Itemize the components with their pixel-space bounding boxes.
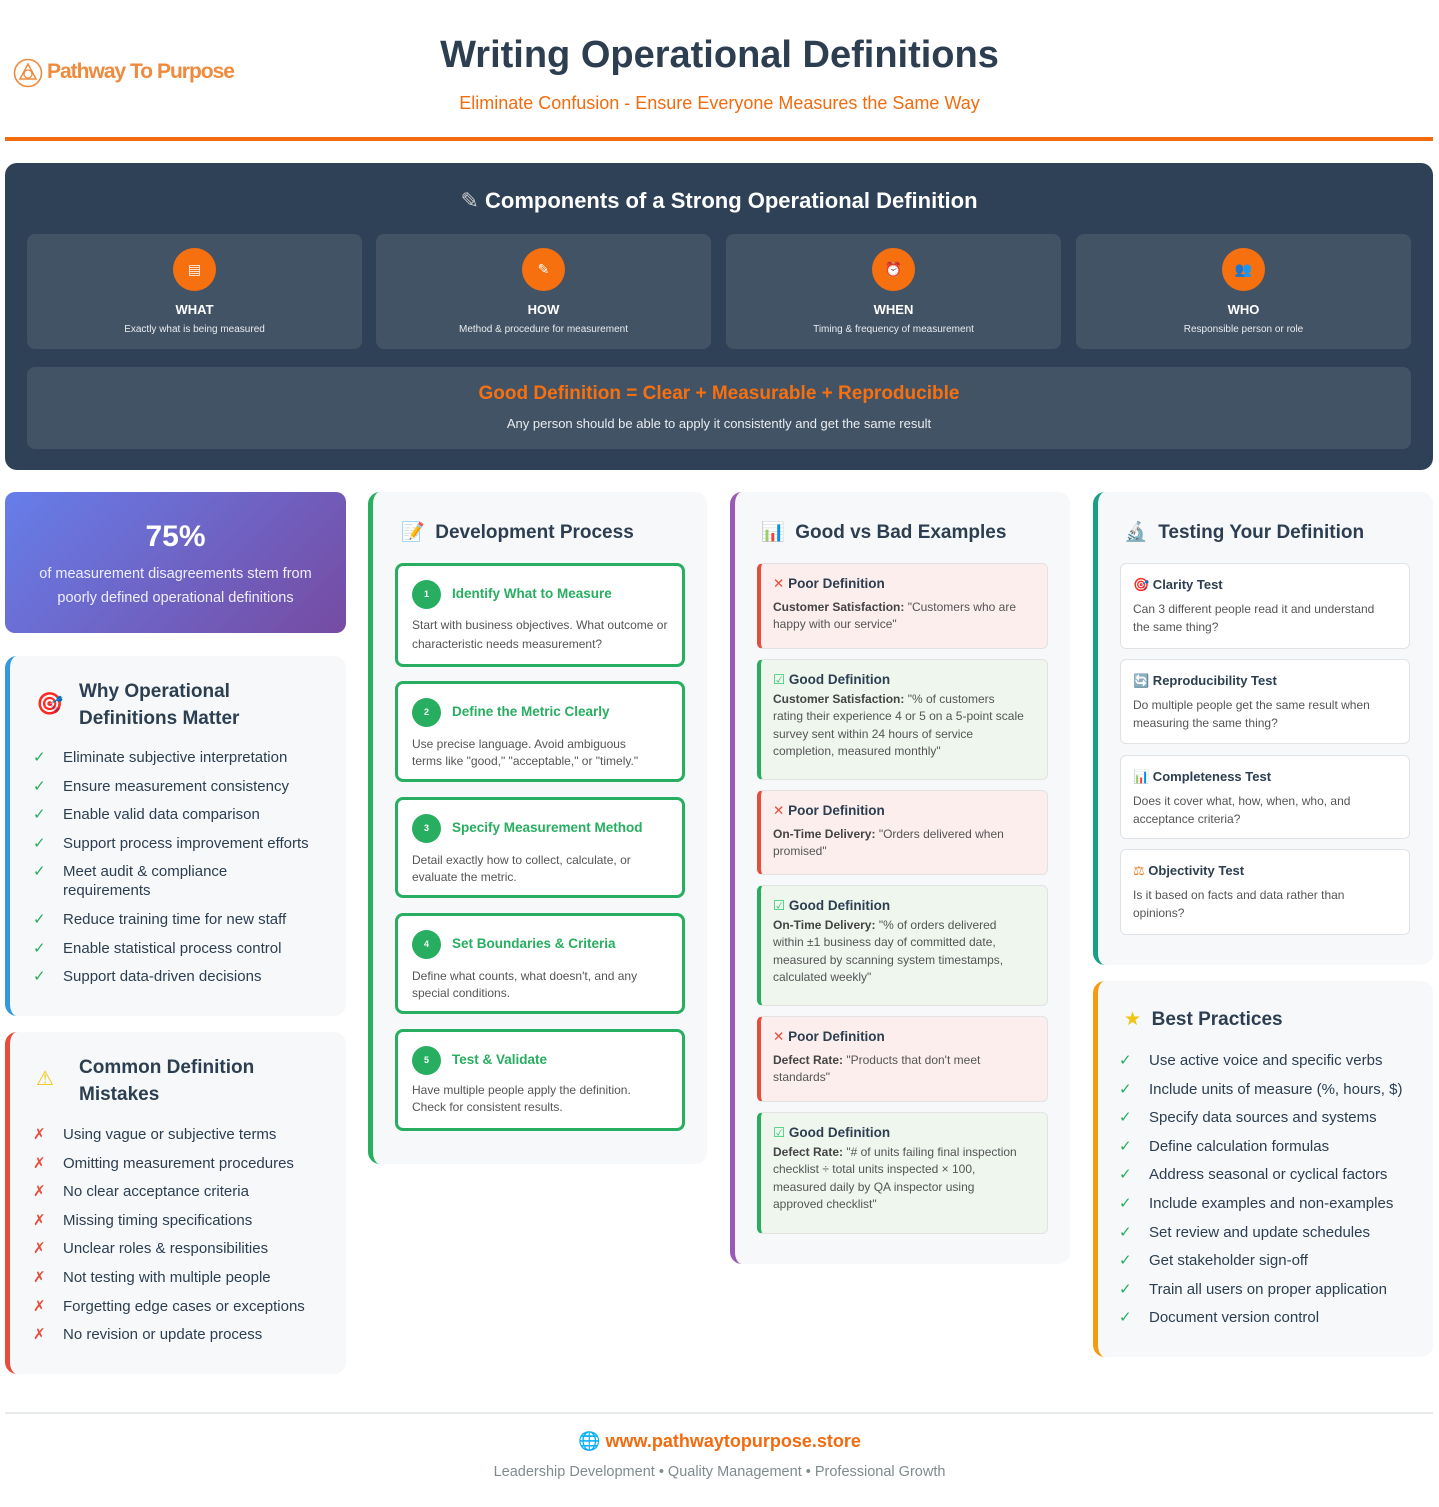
heading: testing: 🔬 Testing Your Definition [1124,522,1364,543]
card: how: Method & procedure for measurement [459,324,628,335]
example good 2: On-Time Delivery: "% of orders delivered within ±1 business day of committed date, measured by scanning system timestamps, calculated weekly" [773,918,1003,984]
step 4: Set Boundaries & Criteria [452,936,616,951]
example poor 1 [757,563,1048,649]
card: who: 👥 [1235,261,1252,277]
stat box: poorly defined operational definitions [57,590,294,606]
panel: mistakes: Missing timing specifications [63,1212,252,1229]
step 5: Test & Validate [452,1052,547,1067]
example poor 3: ✕ Poor Definition [773,1029,885,1044]
panel: best practices: Set review and update schedules [1149,1224,1370,1241]
test: objectivity: ⚖ Objectivity Test [1133,863,1244,878]
card: what: ▤ [188,261,201,277]
panel: why: Enable statistical process control [63,940,281,957]
panel: best practices: Train all users on proper application [1149,1281,1387,1298]
panel: why: Support data-driven decisions [63,968,261,985]
heading: mistakes: ⚠ [36,1068,54,1090]
test: objectivity [1120,849,1410,935]
card: who [1076,234,1411,349]
step 5: 5 [424,1055,429,1065]
step 5 [395,1029,685,1131]
panel: why: requirements [63,882,151,899]
heading: development: 📝 Development Process [401,522,634,543]
step 2: 2 [424,707,429,717]
logo [14,58,234,88]
test: clarity: 🎯 Clarity Test [1133,577,1223,592]
subtitle: Eliminate Confusion - Ensure Everyone Measures the Same Way [459,93,980,113]
test: completeness: Does it cover what, how, when, who, and acceptance criteria? [1133,794,1350,826]
panel: development process [368,492,707,1164]
heading: why: 🎯 [36,691,63,716]
step 3 [395,797,685,898]
example poor 2: On-Time Delivery: "Orders delivered when promised" [773,826,1004,858]
example poor 3: Defect Rate: "Products that don't meet standards" [773,1052,980,1084]
example poor 1: Customer Satisfaction: "Customers who are happy with our service" [773,600,1016,631]
example good 1 [757,659,1048,780]
panel: mistakes: Not testing with multiple people [63,1269,271,1286]
panel: mistakes: Omitting measurement procedures [63,1155,294,1172]
step 1: 1 [424,589,429,599]
panel: mistakes [5,1032,346,1374]
card: who: Responsible person or role [1184,324,1303,335]
step 2 [395,681,685,782]
panel: best practices: Get stakeholder sign-off [1149,1252,1308,1269]
stat box: 75% [145,520,206,553]
heading: examples: 📊 Good vs Bad Examples [761,522,1006,543]
test: reproducibility [1120,659,1410,744]
test: completeness [1120,755,1410,839]
example good 1: ☑ Good Definition [773,672,890,687]
step 1: Start with business objectives. What outcome or characteristic needs measurement? [412,618,667,651]
test: reproducibility: Do multiple people get the same result when measuring the same thing? [1133,698,1370,730]
logo: Pathway To Purpose [47,60,234,83]
title: Writing Operational Definitions [440,34,999,76]
footer: tagline: Leadership Development • Quality Management • Professional Growth [494,1464,945,1480]
panel: mistakes: No revision or update process [63,1326,262,1343]
step 2: Use precise language. Avoid ambiguous terms like "good," "acceptable," or "timely." [412,737,638,768]
test: completeness: 📊 Completeness Test [1133,769,1271,784]
panel: best practices: Document version control [1149,1309,1319,1326]
card: what: WHAT [175,302,214,317]
panel: why: Support process improvement efforts [63,835,309,852]
panel: best practices: Define calculation formulas [1149,1138,1329,1155]
example good 2 [757,885,1048,1006]
heading: why: Why Operational Definitions Matter [79,681,239,729]
heading: components: ✎ Components of a Strong Operational Definition [460,188,978,213]
test: clarity [1120,563,1410,649]
step 1 [395,563,685,667]
example good 3 [757,1112,1048,1234]
test: reproducibility: 🔄 Reproducibility Test [1133,673,1277,688]
panel: examples [730,492,1070,1264]
step 4: Define what counts, what doesn't, and any special conditions. [412,969,637,1000]
panel: best practices: Use active voice and specific verbs [1149,1052,1382,1069]
card: how: HOW [528,302,559,317]
panel: best practices: Address seasonal or cyclical factors [1149,1166,1387,1183]
panel: why: Ensure measurement consistency [63,778,289,795]
panel: why: Enable valid data comparison [63,806,260,823]
step 5: Have multiple people apply the definition. Check for consistent results. [412,1083,631,1114]
example poor 2: ✕ Poor Definition [773,803,885,818]
panel: why: Reduce training time for new staff [63,911,286,928]
test: clarity: Can 3 different people read it and understand the same thing? [1133,602,1374,634]
formula box [27,367,1411,449]
panel: best practices: Specify data sources and systems [1149,1109,1377,1126]
panel: mistakes: No clear acceptance criteria [63,1183,249,1200]
card: when [726,234,1061,349]
example good 1: Customer Satisfaction: "% of customers rating their experience 4 or 5 on a 5-point scale survey sent within 24 hours of service completion, measured monthly" [773,692,1024,758]
step 1: Identify What to Measure [452,586,612,601]
panel: best practices [1093,981,1433,1357]
step 2: Define the Metric Clearly [452,704,610,719]
step 3: Specify Measurement Method [452,820,643,835]
example good 3: Defect Rate: "# of units failing final inspection checklist ÷ total units inspected × 100, measured daily by QA inspector using approved checklist" [773,1144,1017,1211]
step 4: 4 [424,939,429,949]
footer: url: 🌐 www.pathwaytopurpose.store [578,1431,861,1451]
test: objectivity: Is it based on facts and data rather than opinions? [1133,888,1344,920]
card: when: WHEN [874,302,913,317]
example poor 3 [757,1016,1048,1102]
heading: mistakes: Common Definition Mistakes [79,1057,254,1105]
panel: mistakes: Forgetting edge cases or exceptions [63,1298,305,1315]
formula box: Any person should be able to apply it consistently and get the same result [507,416,931,431]
stat box: of measurement disagreements stem from [39,566,312,582]
heading: best practices: ★ Best Practices [1124,1009,1283,1030]
panel: testing [1093,492,1433,965]
panel: why: Eliminate subjective interpretation [63,749,287,766]
panel: mistakes: Unclear roles & responsibilities [63,1240,268,1257]
card: what: Exactly what is being measured [124,324,265,335]
panel: why: Meet audit & compliance [63,863,227,880]
example good 3: ☑ Good Definition [773,1125,890,1140]
stat box [5,492,346,633]
card: what [27,234,362,349]
panel: components [5,163,1433,470]
step 3: 3 [424,823,429,833]
example good 2: ☑ Good Definition [773,898,890,913]
panel: best practices: Include units of measure (%, hours, $) [1149,1081,1402,1098]
card: how: ✎ [538,261,549,277]
step 4 [395,913,685,1014]
example poor 2 [757,790,1048,875]
card: when: ⏰ [885,261,902,277]
example poor 1: ✕ Poor Definition [773,576,885,591]
card: when: Timing & frequency of measurement [813,324,974,335]
panel: why [5,656,346,1016]
panel: mistakes: Using vague or subjective terms [63,1126,276,1143]
card: who: WHO [1228,302,1259,317]
card: how [376,234,711,349]
formula box: Good Definition = Clear + Measurable + Reproducible [479,383,959,404]
step 3: Detail exactly how to collect, calculate, or evaluate the metric. [412,853,631,884]
panel: best practices: Include examples and non-examples [1149,1195,1393,1212]
